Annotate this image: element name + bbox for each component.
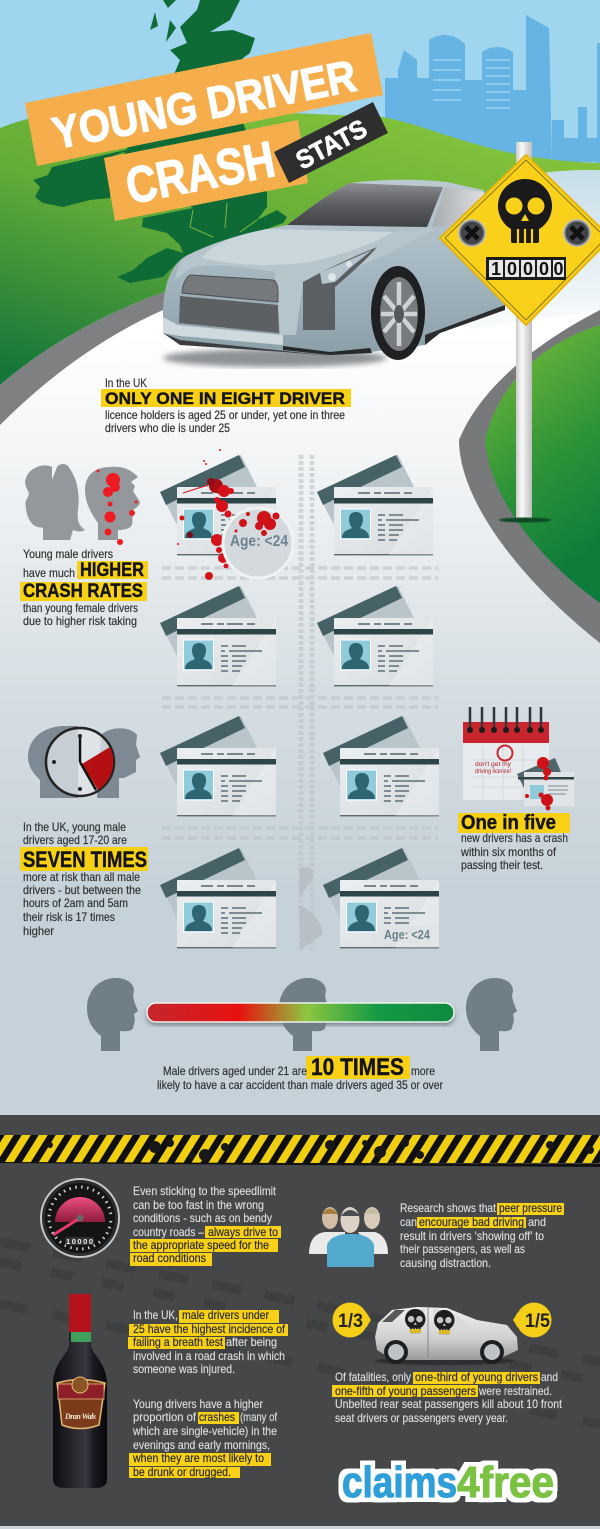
night crashes text: [129, 1397, 278, 1479]
road edge left: [0, 290, 170, 425]
intro statement: licence holders is aged 25 or under, yet one in three: [105, 408, 345, 422]
magnifier: Age: <24: [230, 533, 288, 550]
restraint text: one-third of young drivers: [415, 1370, 538, 1384]
ten times text: [157, 1054, 443, 1092]
stats tag: STATS: [291, 113, 372, 175]
bolts: [458, 219, 591, 247]
speed text: country roads –: [133, 1225, 204, 1239]
peer pressure text: encourage bad driving: [419, 1215, 524, 1229]
icon: female head: [25, 464, 85, 540]
panel: age risk scale: [87, 978, 517, 1092]
restraint text: one-fifth of young passengers: [335, 1384, 476, 1398]
blood splatter: [177, 449, 234, 580]
icon: calendar: driving licence!: [475, 769, 511, 775]
breath test text: someone was injured.: [133, 1362, 235, 1376]
gender text: due to higher risk taking: [23, 614, 137, 628]
one in five text: [458, 812, 570, 872]
night crashes text: be drunk or drugged.: [133, 1465, 231, 1479]
icon: speedometer: 10000: [66, 1237, 93, 1246]
breath test text: male drivers under: [182, 1308, 269, 1322]
gender text: Young male drivers: [23, 547, 113, 561]
icon: speedometer: [41, 1179, 119, 1257]
intro statement: [101, 376, 351, 435]
one in five text: One in five: [461, 812, 556, 834]
age label: [382, 926, 432, 943]
risk text: drivers aged 17-20 are: [23, 833, 127, 847]
restraint text: Unbelted rear seat passengers kill about 10 front: [335, 1397, 563, 1411]
restraint text: Of fatalities, only: [335, 1370, 411, 1384]
icon: wine bottle: [53, 1294, 107, 1488]
icon: calendar: don't get my: [475, 762, 511, 768]
night crashes text: when they are most likely to: [132, 1451, 264, 1465]
gender text: have much: [23, 566, 75, 580]
icon: bloody mini card: [517, 757, 574, 810]
intro statement: drivers who die is under 25: [105, 421, 230, 435]
risk text: SEVEN TIMES: [23, 847, 147, 872]
far road: [470, 170, 600, 330]
card grid: [160, 449, 439, 948]
breath test text: In the UK,: [133, 1308, 178, 1322]
title: young driver: YOUNG DRIVER: [48, 50, 360, 159]
risk text: drivers - but between the: [23, 883, 141, 897]
badge: one third: 1/3: [338, 1311, 363, 1332]
restraint text: were restrained.: [478, 1384, 552, 1398]
road edge and green verge right: [459, 310, 600, 643]
title banners: [25, 33, 388, 221]
night crashes text: which are single-vehicle) in the: [132, 1424, 277, 1438]
restraint text: and: [541, 1370, 558, 1384]
icon: male head with blood: [85, 467, 140, 545]
peer pressure text: causing distraction.: [400, 1256, 491, 1270]
risk text: more at risk than all male: [23, 870, 140, 884]
risk text: In the UK, young male: [23, 820, 126, 834]
sports car: [163, 180, 505, 367]
peer pressure text: can: [400, 1215, 417, 1229]
panel: one in five: [458, 707, 574, 872]
badge: one fifth: 1/5: [525, 1311, 550, 1332]
speed text: can be too fast in the wrong: [133, 1198, 264, 1212]
header scene: [0, 0, 600, 643]
ten times text: more: [411, 1064, 435, 1078]
icon: wine bottle: Dran Wals: [64, 1412, 96, 1421]
sky: [0, 0, 600, 170]
speed text: always drive to: [208, 1225, 278, 1239]
page background: [0, 0, 600, 1115]
odometer: 10000: [491, 259, 564, 279]
tyre tracks: [162, 455, 438, 950]
card grid: Age: <24: [384, 927, 431, 942]
licence cards: [160, 455, 439, 948]
risk text: [20, 820, 148, 938]
peer pressure text: their passengers, as well as: [400, 1242, 525, 1256]
peer pressure text: result in drivers ‘showing off’ to: [400, 1229, 544, 1243]
head silhouettes: [87, 978, 517, 1051]
night crashes text: proportion of: [133, 1410, 197, 1424]
silver car: [375, 1307, 518, 1365]
gender text: than young female drivers: [23, 601, 138, 615]
speed text: [130, 1184, 281, 1266]
yellow diamond: [440, 155, 600, 325]
one in five text: within six months of: [460, 845, 557, 859]
night crashes text: crashes: [199, 1410, 235, 1424]
breath test text: failing a breath test: [133, 1335, 224, 1349]
icon: skull: [498, 179, 552, 243]
panel: seven times: [20, 726, 148, 938]
stats tag: [274, 102, 388, 183]
gender text: HIGHER: [80, 560, 144, 581]
risk text: higher: [23, 924, 54, 938]
speed text: conditions - such as on bendy: [133, 1211, 272, 1225]
post shadow: [499, 518, 551, 522]
breath test text: [128, 1308, 288, 1376]
logo: 4free: [457, 1458, 554, 1507]
night crashes text: (many of: [240, 1410, 278, 1424]
speed text: road conditions: [133, 1251, 206, 1265]
city skyline: [385, 15, 600, 163]
peer pressure text: peer pressure: [499, 1201, 562, 1215]
one in five text: passing their test.: [461, 858, 543, 872]
sign post: [516, 142, 532, 520]
risk gradient bar: [147, 1003, 454, 1025]
night crashes text: evenings and early mornings,: [133, 1438, 270, 1452]
tyre track texture: [0, 1242, 600, 1424]
ten times text: likely to have a car accident than male drivers aged 35 or over: [157, 1078, 443, 1092]
logo: [342, 1458, 554, 1507]
breath test text: involved in a road crash in which: [133, 1349, 285, 1363]
peer pressure text: and: [528, 1215, 546, 1229]
panel: gender comparison: [20, 464, 148, 628]
green hill: [0, 106, 600, 385]
ten times text: Male drivers aged under 21 are: [163, 1064, 307, 1078]
hazard tape: [0, 1135, 600, 1167]
icon: passenger group: [309, 1207, 388, 1267]
gender text: [20, 547, 148, 628]
warning sign with post: [440, 142, 600, 522]
breath test text: 25 have the highest incidence of: [133, 1322, 286, 1336]
risk text: hours of 2am and 5am: [23, 896, 128, 910]
breath test text: after being: [226, 1335, 277, 1349]
icon: calendar: [463, 707, 549, 800]
speed text: the appropriate speed for the: [133, 1238, 269, 1252]
dark background: [0, 1115, 600, 1526]
peer pressure text: [400, 1201, 564, 1270]
restraint text: seat drivers or passengers every year.: [335, 1411, 508, 1425]
logo: claims: [342, 1458, 457, 1507]
intro statement: ONLY ONE IN EIGHT DRIVER: [105, 389, 345, 408]
badge: one fifth: [513, 1302, 552, 1338]
peer pressure text: Research shows that: [400, 1201, 497, 1215]
title: crash: CRASH: [121, 130, 279, 215]
intro statement: In the UK: [105, 376, 147, 390]
risk text: their risk is 17 times: [23, 910, 115, 924]
ten times text: 10 TIMES: [311, 1054, 404, 1081]
speed text: Even sticking to the speedlimit: [133, 1184, 277, 1198]
gender text: CRASH RATES: [23, 581, 143, 602]
restraint text: [332, 1370, 563, 1425]
panel: dark tips: [0, 1115, 600, 1529]
night crashes text: Young drivers have a higher: [133, 1397, 263, 1411]
icon: clock with heads: [28, 726, 140, 798]
one in five text: new drivers has a crash: [461, 831, 568, 845]
magnifier: [223, 508, 293, 578]
badge: one third: [332, 1302, 371, 1338]
UK map: [33, 0, 287, 283]
